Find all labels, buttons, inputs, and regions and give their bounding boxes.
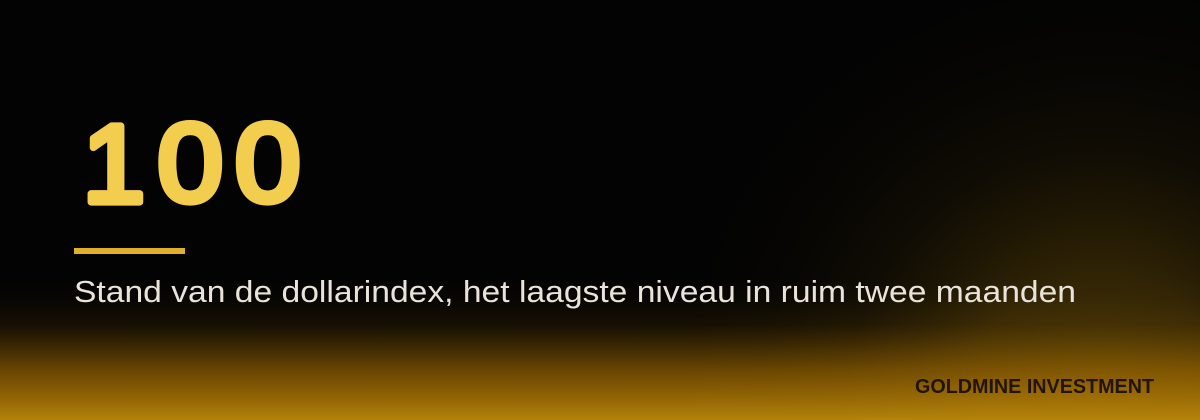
subtitle: Stand van de dollarindex, het laagste niveau in ruim twee maanden bbox=[74, 274, 1076, 309]
accent rule bbox=[74, 248, 185, 254]
big number: 0 bbox=[235, 102, 300, 225]
brand label: GOLDMINE INVESTMENT bbox=[915, 376, 1154, 398]
big number: 1 bbox=[83, 102, 145, 226]
big number: 0 bbox=[158, 102, 223, 225]
big number bbox=[83, 102, 300, 226]
